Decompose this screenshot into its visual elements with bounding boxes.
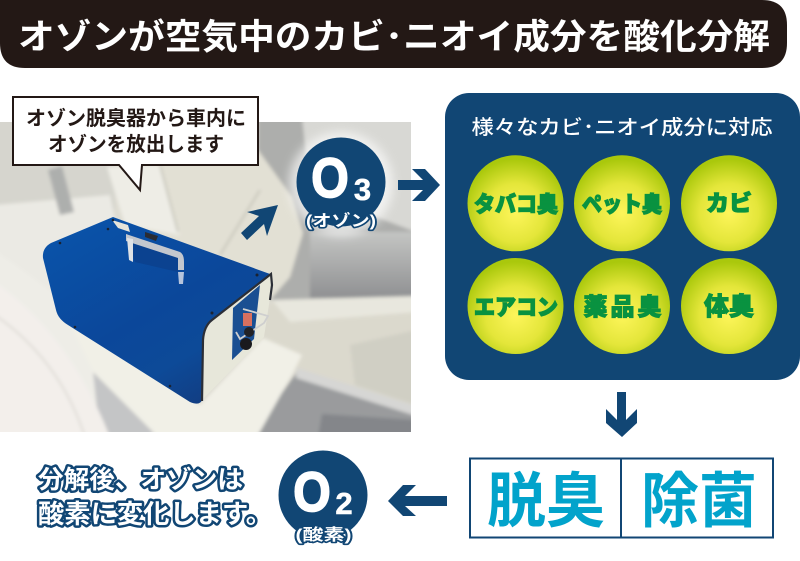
speech bubble: オゾン脱臭器から車内に [26,107,246,130]
arrow: panel down to results [606,392,637,437]
odour: body [681,258,777,354]
carry handle [112,220,184,284]
odour: tobacco [468,155,564,251]
sterilising: 除菌 [641,468,757,535]
ozone O3 badge: (オゾン) [306,212,376,230]
deodorising: 脱臭 [487,468,605,535]
arrow: device to ozone [241,205,278,240]
result caption [38,466,272,529]
control plate [232,285,260,360]
device body [43,217,270,404]
odour: mould [681,155,777,251]
odour: tobacco: タバコ臭 [474,192,558,217]
title [0,0,787,68]
panel: supported odours [445,93,800,380]
result caption: 分解後、オゾンは [38,466,243,494]
odour: mould: カビ [706,191,752,216]
car interior photo [0,117,416,437]
speech bubble [13,97,258,190]
ozone O3 badge [289,132,393,236]
odour: air conditioner [468,258,564,354]
speech bubble: オゾンを放出します [48,133,224,156]
odour: chemical [574,258,670,354]
odour: pet [574,155,670,251]
results box [470,458,773,538]
odour: air conditioner: エアコン [474,295,558,320]
title: オゾンが空気中のカビ･ニオイ成分を酸化分解 [18,18,770,57]
odour: pet: ペット臭 [582,192,662,217]
oxygen O2 badge: O [293,462,331,524]
odour: body: 体臭 [704,293,754,321]
odour: chemical: 薬品臭 [584,294,662,321]
ozone generator device [43,217,272,404]
result caption: 酸素に変化します。 [38,499,272,529]
panel heading: 様々なカビ･ニオイ成分に対応 [472,116,772,139]
arrow: results to oxygen [388,485,447,516]
oxygen O2 badge: 2 [335,486,353,521]
arrow: ozone to panel [398,169,440,201]
ozone O3 badge: O [311,148,349,210]
ozone O3 badge: 3 [354,172,371,207]
oxygen O2 badge: (酸素) [296,526,352,544]
device end plate [202,275,272,400]
screws [59,219,259,387]
oxygen O2 badge [278,450,368,544]
